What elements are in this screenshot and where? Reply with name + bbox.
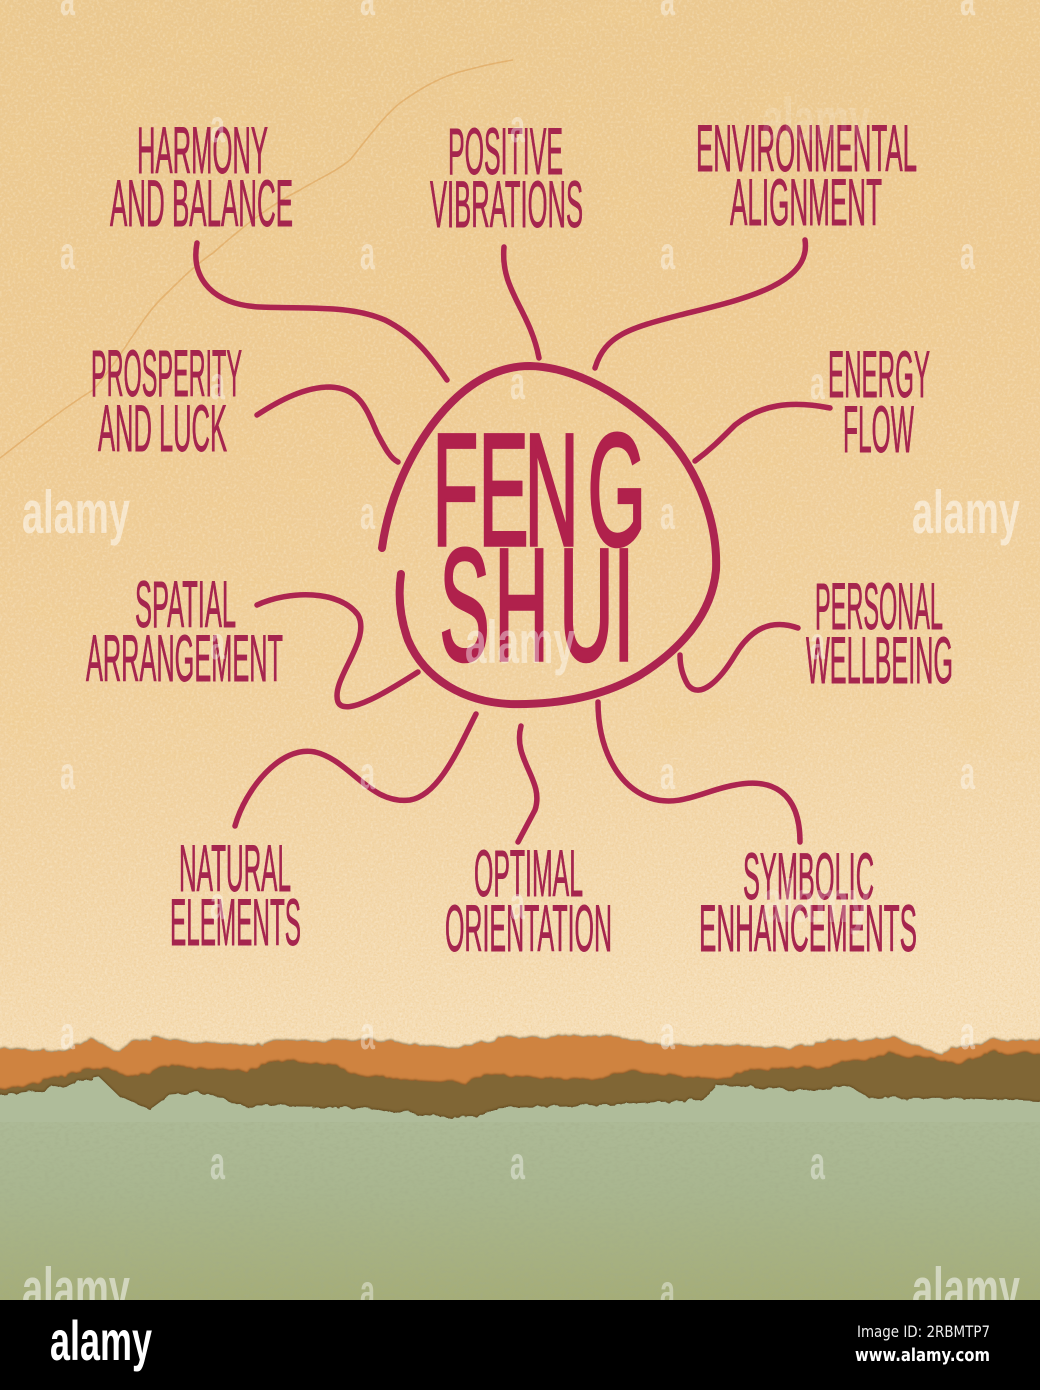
- title: FENG SHUI: [432, 402, 646, 695]
- connector: personal wellbeing: [680, 624, 798, 690]
- title word: SHUI: SHUI: [439, 517, 634, 695]
- watermarks: alamy: a: [60, 227, 75, 279]
- panel: torn orange, brown and green paper layers: [0, 1035, 1040, 1300]
- connector: prosperity and luck: [257, 387, 398, 462]
- infographic: feng shui mind map on handmade paper: ARRANGEMENT: [86, 621, 283, 695]
- connector: optimal orientation: [518, 726, 537, 842]
- infographic: feng shui mind map on handmade paper: POSITIVE: [448, 114, 563, 188]
- watermarks: alamy: a: [660, 227, 675, 279]
- watermarks: alamy: a: [210, 100, 225, 152]
- footer bar: [0, 1300, 1040, 1390]
- watermarks: alamy: a: [210, 877, 225, 929]
- connector: positive vibrations: [504, 247, 539, 358]
- footer url: www.alamy.com: [855, 1345, 990, 1366]
- label: spatial arrangement: [86, 567, 283, 695]
- infographic: feng shui mind map on handmade paper: PROSPERITY: [91, 336, 242, 410]
- watermarks: alamy: a: [210, 617, 225, 669]
- watermarks: alamy: a: [210, 357, 225, 409]
- infographic: feng shui mind map on handmade paper: NATURAL: [179, 831, 291, 905]
- connector: energy flow: [695, 404, 830, 461]
- watermarks: alamy: a: [510, 357, 525, 409]
- label: harmony and balance: [110, 113, 293, 240]
- panel: cream handmade paper background: [0, 0, 1040, 1110]
- center circle outline: [382, 366, 716, 704]
- watermarks: alamy: a: [660, 1265, 675, 1317]
- watermarks: alamy: a: [660, 487, 675, 539]
- watermarks: alamy: a: [510, 877, 525, 929]
- connector: spatial arrangement: [257, 595, 418, 707]
- infographic: feng shui mind map on handmade paper: ORIENTATION: [445, 891, 612, 965]
- watermarks: alamy: alamy: [22, 1256, 130, 1323]
- footer logo: alamy: alamy: [50, 1309, 152, 1372]
- watermarks: alamy: a: [510, 100, 525, 152]
- infographic: feng shui mind map on handmade paper: HARMONY: [137, 113, 268, 187]
- label: optimal orientation: [445, 836, 612, 965]
- watermarks: alamy: alamy: [22, 479, 130, 546]
- watermarks: alamy: a: [510, 1137, 525, 1189]
- watermarks: alamy: alamy: [465, 609, 575, 676]
- watermarks: alamy: a: [960, 747, 975, 799]
- connector: harmony and balance: [196, 243, 447, 380]
- footer image id: Image ID: 2RBMTP7: [857, 1322, 990, 1341]
- label: prosperity and luck: [91, 336, 242, 465]
- watermarks: alamy: a: [810, 1137, 825, 1189]
- watermarks: alamy: a: [810, 617, 825, 669]
- infographic: feng shui mind map on handmade paper: AND LUCK: [98, 391, 227, 465]
- watermarks: alamy: a: [60, 1007, 75, 1059]
- watermarks: alamy: a: [360, 747, 375, 799]
- infographic: feng shui mind map on handmade paper: ELEMENTS: [170, 885, 301, 959]
- infographic: feng shui mind map on handmade paper: VIBRATIONS: [430, 167, 583, 241]
- watermarks: alamy: a: [960, 227, 975, 279]
- watermarks: alamy: a: [210, 1137, 225, 1189]
- watermarks: alamy: a: [60, 747, 75, 799]
- label: environmental alignment: [696, 111, 917, 239]
- title word: FENG: FENG: [432, 402, 646, 580]
- label: symbolic enhancements: [699, 839, 917, 965]
- label: energy flow: [828, 337, 930, 466]
- watermarks: alamy: alamy: [762, 86, 870, 153]
- infographic: feng shui mind map on handmade paper: OPTIMAL: [474, 836, 583, 910]
- watermarks: alamy: alamy: [762, 868, 870, 935]
- label: natural elements: [170, 831, 301, 959]
- watermarks: alamy: a: [360, 1265, 375, 1317]
- watermarks: alamy: a: [810, 357, 825, 409]
- infographic: feng shui mind map on handmade paper: FLOW: [843, 392, 914, 466]
- connector: symbolic enhancements: [598, 702, 800, 842]
- label: positive vibrations: [430, 114, 583, 241]
- watermarks: alamy: a: [360, 487, 375, 539]
- watermarks: alamy: a: [960, 1007, 975, 1059]
- watermarks: alamy: a: [360, 227, 375, 279]
- connector: natural elements: [235, 714, 476, 826]
- connector: environmental alignment: [595, 240, 805, 368]
- label: personal wellbeing: [806, 569, 953, 697]
- watermarks: alamy: a: [660, 747, 675, 799]
- watermarks: alamy: a: [660, 1007, 675, 1059]
- label: spatial arrangement: SPATIAL: [135, 567, 236, 641]
- watermarks: alamy: a: [360, 1007, 375, 1059]
- infographic: feng shui mind map on handmade paper: AND BALANCE: [110, 166, 293, 240]
